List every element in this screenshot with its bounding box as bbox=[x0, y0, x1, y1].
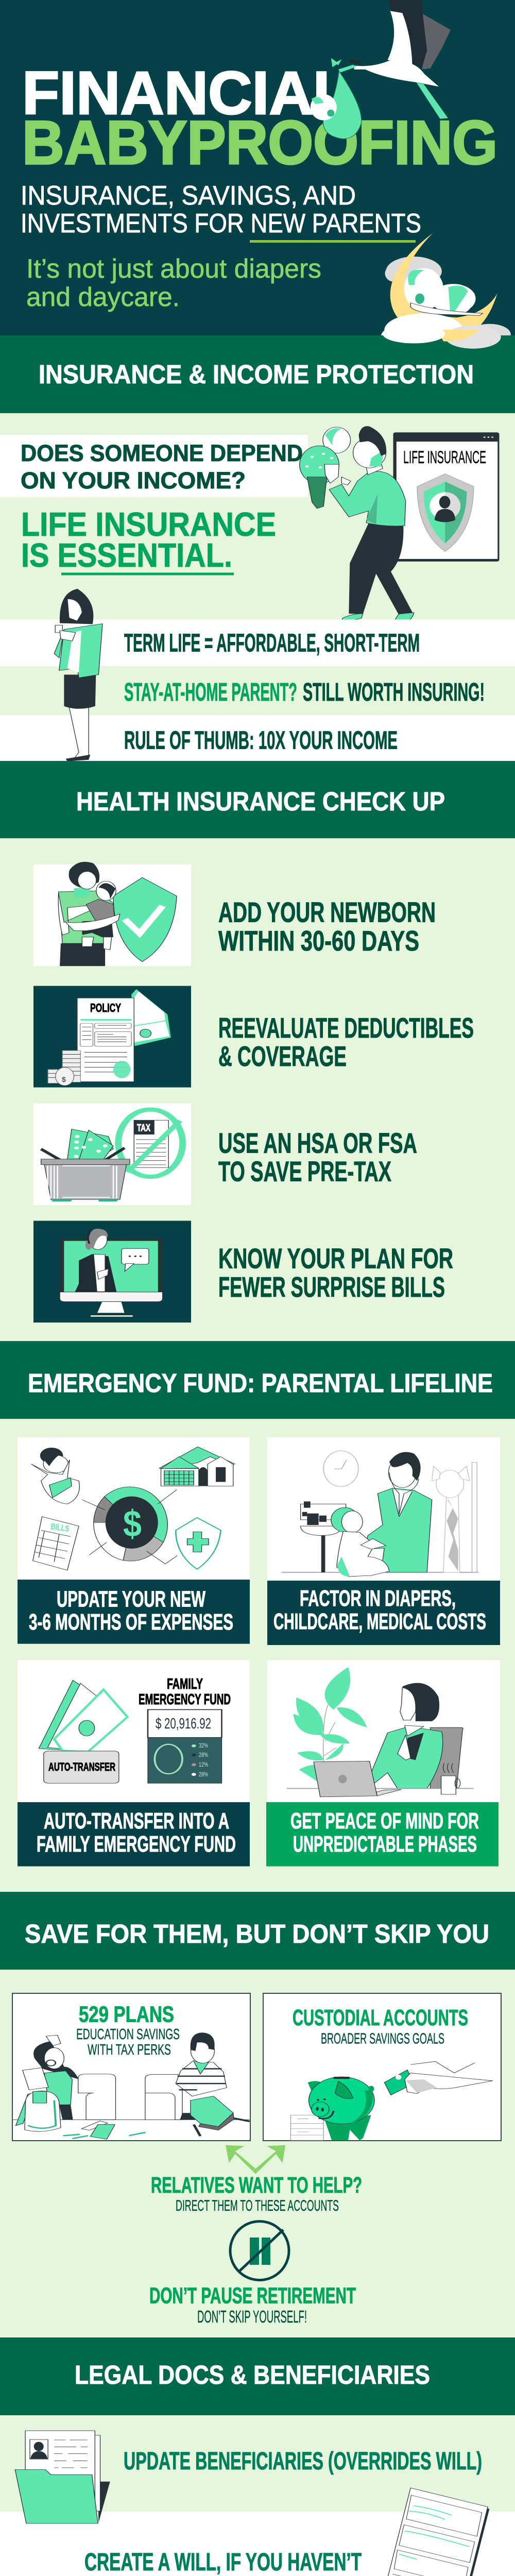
statement: life insurance is essential bbox=[21, 505, 276, 575]
text: custodial accounts bbox=[293, 2005, 468, 2047]
item: add your newborn bbox=[33, 862, 436, 966]
item: reevaluate deductibles bbox=[33, 986, 474, 1088]
panel: hero header bbox=[0, 0, 515, 349]
illustration: family emergency fund dashboard: 28% bbox=[199, 1771, 208, 1778]
text: 529 plans: EDUCATION SAVINGS bbox=[76, 2026, 180, 2043]
tagline: and daycare. bbox=[26, 282, 180, 312]
card: custodial accounts bbox=[263, 1993, 501, 2141]
icon: do not pause bbox=[230, 2222, 289, 2280]
illustration: expense donut: $ bbox=[123, 1503, 142, 1545]
text: 529 plans: WITH TAX PERKS bbox=[88, 2042, 171, 2058]
icon: basket with pills and no tax sign: TAX bbox=[137, 1123, 150, 1133]
caption: auto-transfer: FAMILY EMERGENCY FUND bbox=[37, 1832, 236, 1857]
item: know your plan bbox=[33, 1221, 453, 1323]
text: relatives want to help: DIRECT THEM TO THESE ACCOUNTS bbox=[176, 2197, 339, 2214]
card: 529 plans bbox=[12, 1993, 250, 2141]
illustration: pediatrician with baby bbox=[267, 1437, 500, 1581]
illustration: students with backpacks bbox=[13, 2032, 250, 2139]
caption: auto-transfer: AUTO-TRANSFER INTO A bbox=[44, 1808, 229, 1834]
caption: update expenses: UPDATE YOUR NEW bbox=[57, 1587, 205, 1612]
panel: emergency fund section bbox=[0, 1341, 515, 1866]
tagline bbox=[26, 254, 321, 312]
section heading band bbox=[0, 1892, 515, 1970]
title: Babyproofing: BABYPROOFING bbox=[22, 108, 497, 177]
subtitle line two: INVESTMENTS FOR NEW PARENTS bbox=[21, 209, 421, 239]
text: know your plan bbox=[218, 1243, 453, 1303]
text: add your newborn bbox=[218, 896, 436, 957]
question panel: DOES SOMEONE DEPEND bbox=[21, 440, 303, 466]
strip: term life bbox=[0, 619, 515, 666]
text: relatives want to help: RELATIVES WANT TO HELP? bbox=[151, 2173, 362, 2198]
caption: update expenses: 3-6 MONTHS OF EXPENSES bbox=[29, 1609, 233, 1635]
icon: woman with phone bbox=[54, 589, 102, 761]
caption: update expenses bbox=[18, 1580, 250, 1644]
underline: new parents bbox=[250, 240, 416, 243]
section heading band bbox=[0, 761, 515, 838]
card: factor in diapers bbox=[267, 1437, 500, 1645]
illustration: expense donut: BILLS bbox=[50, 1521, 70, 1534]
card: peace of mind bbox=[266, 1660, 500, 1866]
illustration: family emergency fund dashboard bbox=[18, 1660, 250, 1802]
arrows: relatives to accounts bbox=[226, 2145, 285, 2174]
illustration: family emergency fund dashboard: $ 20,916.92 bbox=[156, 1716, 211, 1732]
icon: mother, baby and shield bbox=[33, 862, 191, 966]
caption: auto-transfer bbox=[18, 1802, 250, 1866]
icon: life insurance policy window bbox=[393, 432, 499, 562]
question panel: ON YOUR INCOME? bbox=[21, 467, 246, 494]
section heading band: LEGAL DOCS & BENEFICIARIES bbox=[75, 2360, 430, 2389]
card: update expenses bbox=[18, 1437, 250, 1644]
illustration: family emergency fund dashboard: 12% bbox=[199, 1761, 208, 1768]
illustration: expense donut bbox=[18, 1437, 250, 1580]
icon: folder with beneficiary form bbox=[15, 2431, 110, 2523]
text: don't pause retirement: DON’T SKIP YOURSELF! bbox=[197, 2307, 307, 2326]
illustration: calm woman at laptop with plant bbox=[267, 1660, 500, 1802]
section heading band: HEALTH INSURANCE CHECK UP bbox=[76, 787, 445, 816]
text: HSA or FSA: USE AN HSA OR FSA bbox=[218, 1127, 417, 1159]
icon: policy document with cash: POLICY bbox=[90, 1001, 121, 1014]
illustration: family emergency fund dashboard: AUTO-TRANSFER bbox=[48, 1760, 115, 1773]
tagline: It’s not just about diapers bbox=[26, 254, 321, 284]
text: custodial accounts: BROADER SAVINGS GOALS bbox=[321, 2031, 444, 2047]
panel: insurance and income protection section bbox=[0, 325, 515, 761]
panel: health insurance check up section bbox=[0, 761, 515, 1323]
statement: life insurance is essential: IS ESSENTIAL. bbox=[21, 536, 232, 574]
illustration: family emergency fund dashboard: EMERGENCY FUND bbox=[139, 1691, 231, 1708]
section heading band bbox=[0, 2337, 515, 2415]
text: 529 plans: 529 PLANS bbox=[79, 2002, 174, 2027]
section heading band bbox=[0, 335, 515, 413]
icon: policy document with cash bbox=[33, 986, 191, 1088]
icon: stork carrying baby bbox=[311, 0, 451, 139]
illustration: family emergency fund dashboard: 28% bbox=[199, 1751, 208, 1758]
question panel bbox=[0, 435, 308, 497]
panel: save for them section bbox=[0, 1892, 515, 2326]
section heading band: INSURANCE & INCOME PROTECTION bbox=[39, 360, 474, 389]
text: don't pause retirement: DON’T PAUSE RETIREMENT bbox=[149, 2283, 356, 2309]
section heading band bbox=[0, 1341, 515, 1419]
section heading band: SAVE FOR THEM, BUT DON’T SKIP YOU bbox=[25, 1919, 489, 1948]
illustration: family emergency fund dashboard: 32% bbox=[199, 1742, 208, 1749]
text: reevaluate deductibles bbox=[218, 1012, 474, 1072]
illustration: family emergency fund dashboard: FAMILY bbox=[167, 1676, 203, 1692]
panel: legal docs and beneficiaries section bbox=[0, 2337, 515, 2576]
icon: clouds over band bbox=[383, 325, 501, 349]
text: don't pause retirement bbox=[149, 2283, 356, 2326]
text: 529 plans bbox=[76, 2002, 180, 2058]
item: HSA or FSA bbox=[33, 1104, 417, 1205]
icon: will document bbox=[383, 2488, 489, 2576]
title: Financial: FINANCIAL bbox=[22, 59, 350, 127]
subtitle line one: INSURANCE, SAVINGS, AND bbox=[21, 181, 356, 211]
icon: basket with pills and no tax sign bbox=[33, 1104, 191, 1205]
text: create a will: CREATE A WILL, IF YOU HAVEN’T bbox=[84, 2549, 362, 2576]
icon: baby sleeping on moon bbox=[381, 233, 511, 349]
text: add your newborn: WITHIN 30-60 DAYS bbox=[218, 925, 419, 957]
strip: stay-at-home parent: STAY-AT-HOME PARENT? bbox=[124, 679, 297, 706]
icon: father lifting baby bbox=[300, 426, 414, 626]
text: HSA or FSA bbox=[218, 1127, 417, 1188]
icon: policy document with cash: $ bbox=[62, 1075, 66, 1083]
card: auto-transfer bbox=[18, 1660, 250, 1866]
icon: advisor on monitor bbox=[33, 1221, 191, 1323]
text: HSA or FSA: TO SAVE PRE-TAX bbox=[218, 1156, 391, 1188]
strip: rule of thumb bbox=[0, 715, 515, 761]
text: reevaluate deductibles: & COVERAGE bbox=[218, 1040, 347, 1072]
illustration: piggy bank and hand with cash bbox=[290, 2061, 493, 2140]
statement: life insurance is essential: LIFE INSURANCE bbox=[21, 505, 276, 543]
caption: factor in diapers bbox=[267, 1581, 500, 1645]
text: relatives want to help bbox=[151, 2173, 362, 2214]
caption: peace of mind bbox=[266, 1802, 499, 1866]
